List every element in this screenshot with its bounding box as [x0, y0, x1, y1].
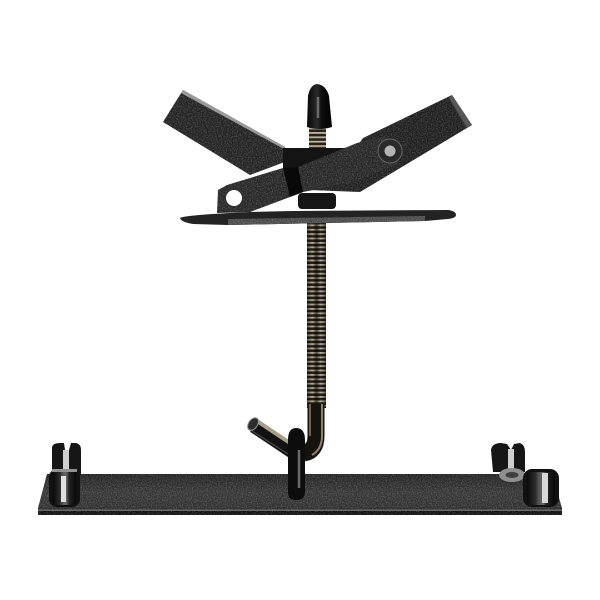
washer [499, 468, 525, 482]
centre bracket [283, 148, 345, 172]
rear left clip [52, 443, 81, 475]
pin tube [245, 416, 293, 454]
left arm [163, 90, 290, 175]
front right clip [523, 469, 559, 507]
black nut [298, 193, 336, 209]
loop on base plate [288, 428, 305, 500]
knob [307, 84, 332, 129]
rod hook [304, 404, 322, 455]
threaded rod [307, 126, 326, 408]
right arm [310, 95, 472, 192]
base plate [38, 474, 562, 515]
lever [217, 137, 403, 213]
rear right clip [491, 443, 525, 472]
mounting disc [180, 210, 456, 225]
front left clip [49, 469, 80, 507]
